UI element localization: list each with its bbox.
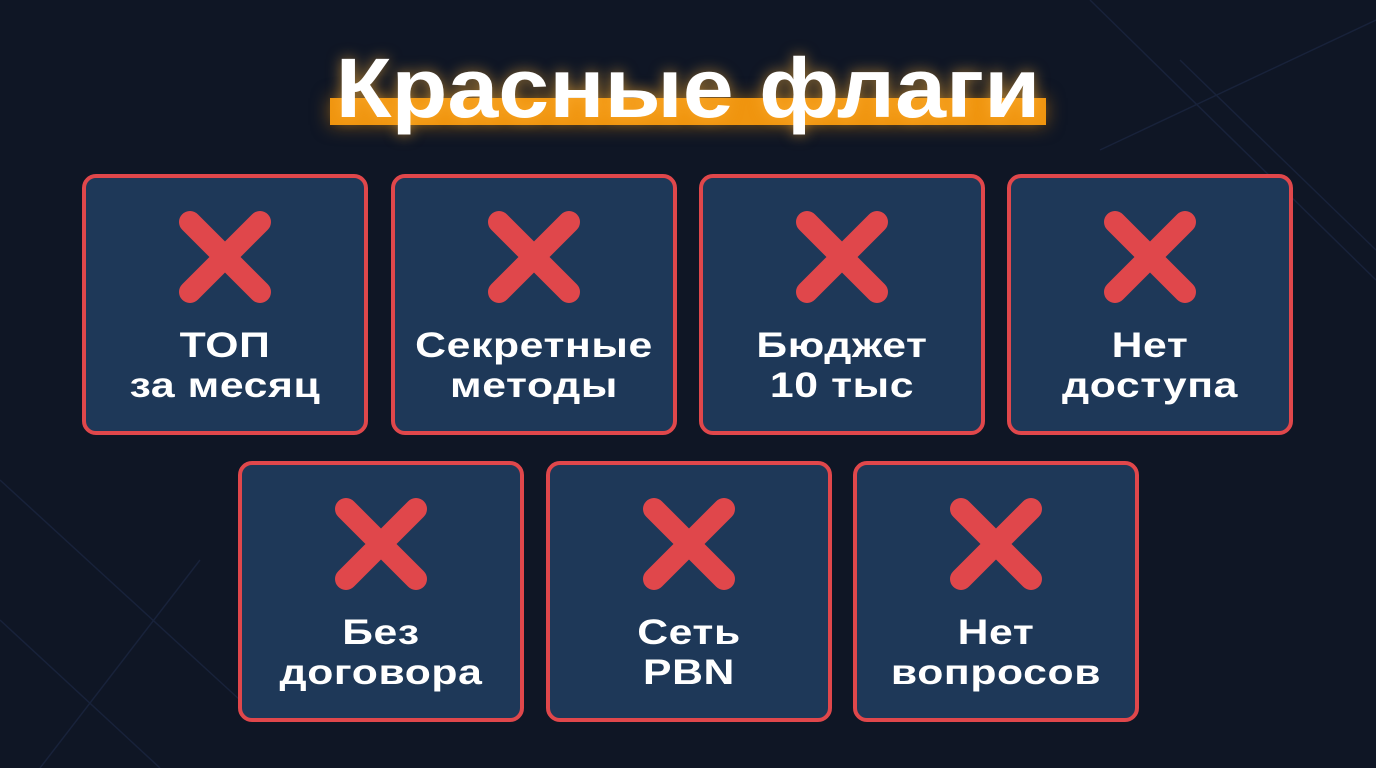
- card: Сеть PBN: Сеть: [637, 613, 741, 652]
- card: Нет доступа: [1007, 174, 1293, 435]
- card: Секретные методы: Секретные: [415, 326, 653, 365]
- card: Бюджет 10 тыс: 10 тыс: [770, 366, 914, 405]
- card: Нет вопросов: вопросов: [891, 653, 1101, 692]
- card: Секретные методы: методы: [450, 366, 618, 405]
- title underline bar: [330, 98, 1046, 125]
- card: Без договора: [238, 461, 524, 722]
- card: Нет вопросов: Нет: [958, 613, 1034, 652]
- card: Нет вопросов: [853, 461, 1139, 722]
- card: ТОП за месяц: [82, 174, 368, 435]
- card: Без договора: Без: [342, 613, 420, 652]
- title: Красные флаги: [336, 41, 1040, 135]
- card: ТОП за месяц: за месяц: [130, 366, 320, 405]
- card: Бюджет 10 тыс: Бюджет: [756, 326, 928, 365]
- card: ТОП за месяц: ТОП: [180, 326, 270, 365]
- card: Сеть PBN: PBN: [643, 653, 735, 692]
- card: Нет доступа: Нет: [1112, 326, 1188, 365]
- card: Нет доступа: доступа: [1062, 366, 1238, 405]
- card: Бюджет 10 тыс: [699, 174, 985, 435]
- card: Секретные методы: [391, 174, 677, 435]
- card: Без договора: договора: [280, 653, 482, 692]
- card: Сеть PBN: [546, 461, 832, 722]
